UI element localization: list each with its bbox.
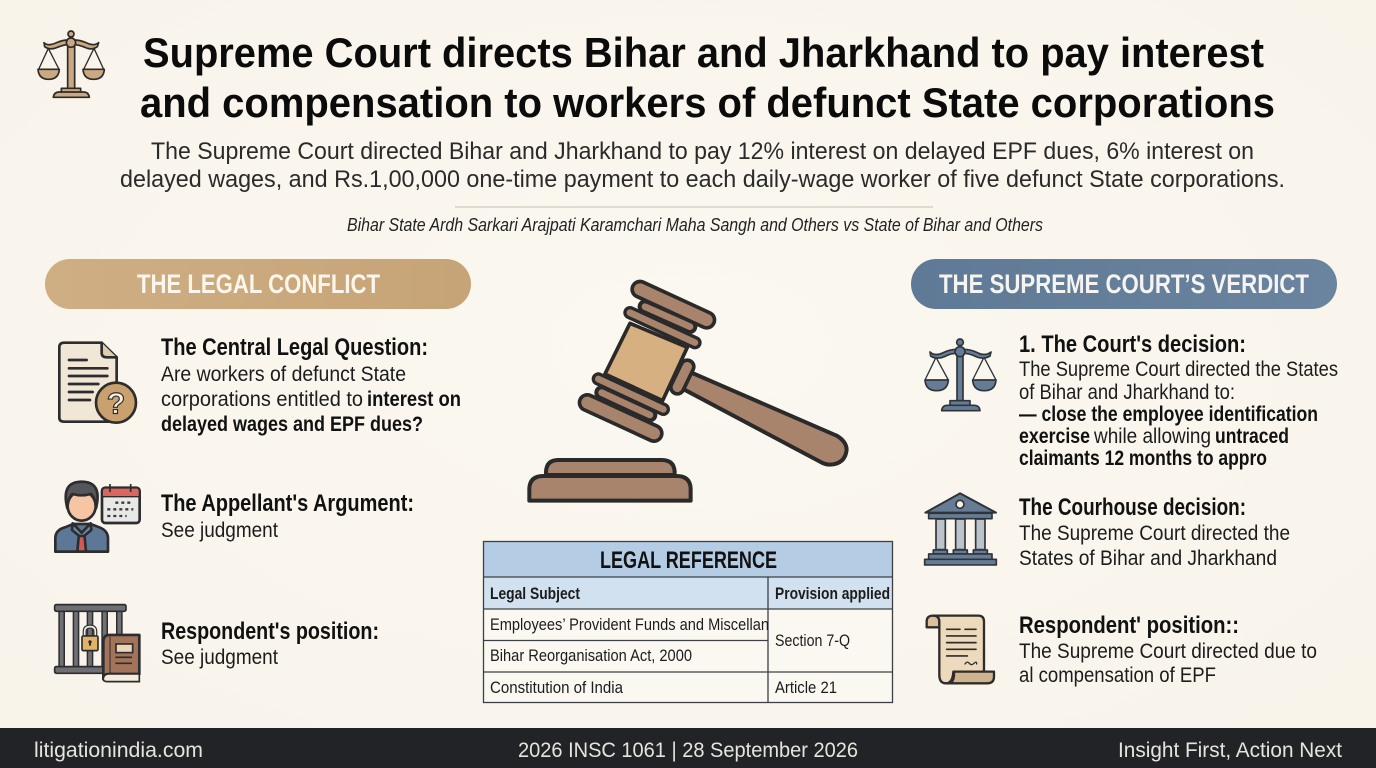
- panel heading: the legal conflict: [45, 259, 471, 309]
- gavel lower rings: [602, 393, 650, 415]
- footer bar: 2026 INSC 1061 | 28 September 2026: [518, 738, 858, 762]
- gavel upper rings: [645, 307, 690, 327]
- subtitle: delayed wages, and Rs.1,00,000 one-time payment to each daily-wage worker of five defunct State corporations.: [120, 166, 1285, 193]
- icon: scales of justice (verdict): [925, 339, 996, 411]
- central legal question text: Are workers of defunct State: [161, 362, 406, 386]
- appellant's argument text: The Appellant's Argument:: [161, 490, 414, 517]
- icon: scroll: [927, 616, 994, 683]
- table rows: Employees’ Provident Funds and Miscellan: [490, 615, 769, 634]
- panel heading: the supreme court's verdict: [911, 259, 1337, 309]
- sound block: [546, 460, 675, 475]
- title: and compensation to workers of defunct State corporations: [140, 79, 1275, 126]
- court's decision text: while allowing: [1093, 424, 1211, 448]
- court's decision text: of Bihar and Jharkhand to:: [1019, 380, 1235, 404]
- panel: supreme court's verdict: [925, 331, 1338, 687]
- table title: LEGAL REFERENCE: [600, 547, 777, 574]
- courthouse decision text: The Courhouse decision:: [1019, 494, 1246, 521]
- central legal question text: corporations entitled to: [161, 387, 363, 411]
- table rows: Article 21: [775, 678, 837, 697]
- illustration: gavel and sound block: [529, 289, 847, 501]
- gavel centre block: [605, 323, 687, 401]
- title: [140, 29, 1275, 126]
- icon: document with question mark: [59, 343, 136, 423]
- subtitle: [120, 138, 1285, 193]
- panel heading: the supreme court's verdict: THE SUPREME COURT’S VERDICT: [939, 269, 1309, 299]
- court's decision text: untraced: [1215, 424, 1289, 448]
- courthouse decision text: The Supreme Court directed the: [1019, 521, 1290, 545]
- respondent position text (verdict): al compensation of EPF: [1019, 663, 1216, 687]
- table header row: Legal Subject: [490, 584, 580, 603]
- table header row: Provision applied: [775, 584, 890, 603]
- icon: document with question mark: ?: [107, 387, 125, 420]
- icon: courthouse: [925, 493, 996, 565]
- respondent position text (verdict): [1019, 612, 1317, 687]
- table rows: [490, 615, 850, 697]
- court's decision text: — close the employee identification: [1019, 402, 1318, 426]
- respondent's position text: See judgment: [161, 645, 278, 669]
- court's decision text: 1. The Court's decision:: [1019, 331, 1246, 358]
- table rows: Bihar Reorganisation Act, 2000: [490, 646, 692, 665]
- appellant's argument text: [161, 490, 414, 542]
- panel heading: the legal conflict: THE LEGAL CONFLICT: [137, 269, 380, 299]
- subtitle: The Supreme Court directed Bihar and Jharkhand to pay 12% interest on delayed EPF dues, 6% interest on: [151, 138, 1254, 165]
- icon: scales of justice (header): [38, 31, 104, 97]
- courthouse decision text: [1019, 494, 1290, 570]
- table title: [483, 541, 893, 577]
- icon: appellant with calendar: [55, 482, 140, 552]
- case citation: Bihar State Ardh Sarkari Arajpati Karamchari Maha Sangh and Others vs State of Bihar and Others: [347, 215, 1043, 235]
- gavel handle: [680, 372, 847, 465]
- respondent position text (verdict): Respondent' position::: [1019, 612, 1239, 639]
- icon: prison bars, padlock and book: [55, 605, 139, 682]
- title: Supreme Court directs Bihar and Jharkhand to pay interest: [143, 29, 1264, 76]
- court's decision text: [1019, 331, 1338, 470]
- footer bar: [0, 728, 1376, 768]
- table: legal reference: [483, 541, 893, 703]
- respondent's position text: Respondent's position:: [161, 618, 379, 645]
- respondent's position text: [161, 618, 379, 669]
- respondent position text (verdict): The Supreme Court directed due to: [1019, 639, 1317, 663]
- central legal question text: delayed wages and EPF dues?: [161, 412, 423, 436]
- table header row: [483, 577, 893, 609]
- central legal question text: [161, 334, 461, 436]
- court's decision text: exercise: [1019, 424, 1090, 448]
- gavel ferrule: [677, 367, 687, 387]
- central legal question text: The Central Legal Question:: [161, 334, 428, 361]
- table rows: Section 7-Q: [775, 631, 850, 650]
- panel: legal conflict: [55, 334, 461, 682]
- appellant's argument text: See judgment: [161, 518, 278, 542]
- court's decision text: claimants 12 months to appro: [1019, 446, 1267, 470]
- courthouse decision text: States of Bihar and Jharkhand: [1019, 546, 1277, 570]
- footer bar: Insight First, Action Next: [1118, 738, 1342, 762]
- central legal question text: interest on: [367, 387, 461, 411]
- table rows: Constitution of India: [490, 678, 623, 697]
- footer bar: litigationindia.com: [34, 738, 203, 762]
